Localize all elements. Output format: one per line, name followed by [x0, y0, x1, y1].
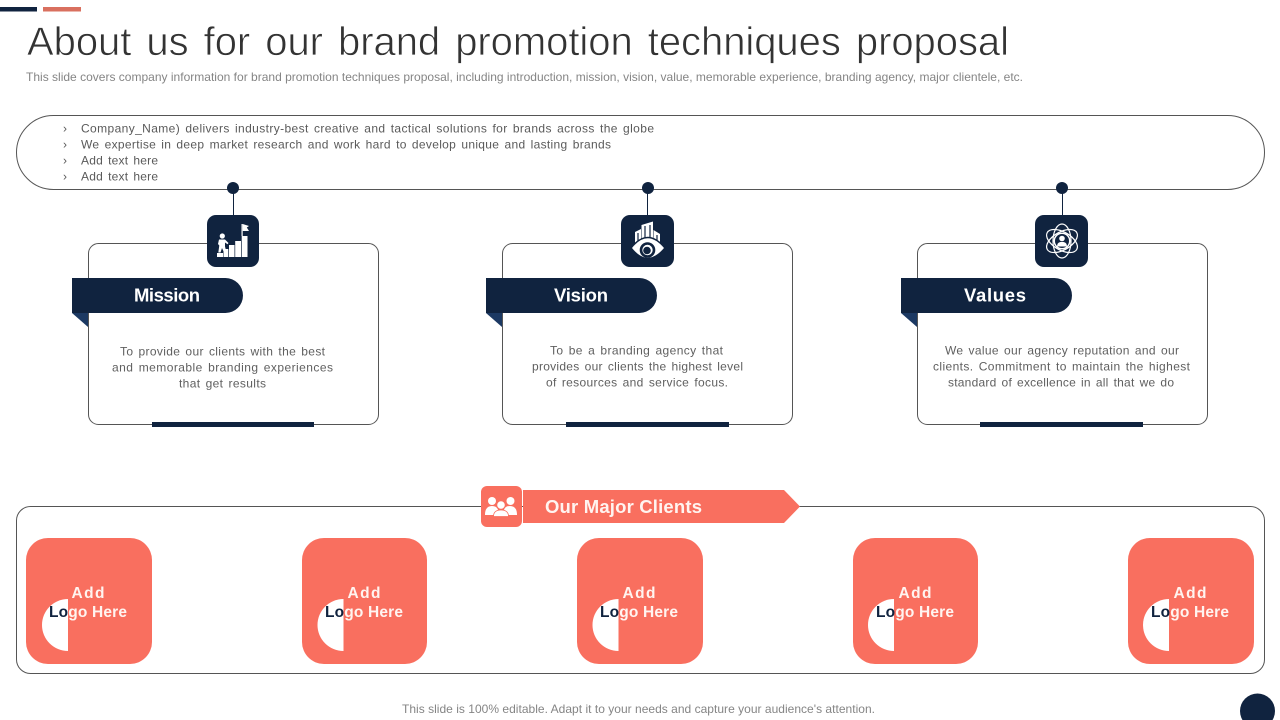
footer note: This slide is 100% editable. Adapt it to your needs and capture your audience's attention. [402, 702, 875, 716]
panel: values [901, 182, 1208, 427]
text: vision description: of resources and service focus. [546, 376, 728, 390]
connector: values [1056, 182, 1068, 216]
accent bar: vision [566, 422, 729, 427]
panel: major clients [16, 486, 1264, 674]
panel: introduction pill: › [63, 122, 67, 136]
text: vision description: provides our clients the highest level [532, 360, 743, 374]
panel: introduction pill: › [63, 138, 67, 152]
panel: introduction pill: Add text here [81, 170, 158, 184]
panel: introduction pill [16, 116, 1264, 190]
ribbon: values [901, 278, 1072, 327]
text: vision description [532, 344, 743, 390]
accent bar: values [980, 422, 1143, 427]
ribbon: mission [72, 278, 243, 327]
text: mission description: and memorable branding experiences [112, 360, 333, 374]
logo tile 2: Logo Here [325, 604, 403, 621]
ribbon: values: Values [964, 284, 1026, 306]
banner: our major clients [523, 490, 800, 523]
text: mission description [112, 344, 333, 390]
subtitle: This slide covers company information for brand promotion techniques proposal, including introduction, mission, vision, value, memorable experience, branding agency, major clientele, etc. [26, 70, 1023, 84]
panel: introduction pill: › [63, 170, 67, 184]
text: values description: We value our agency reputation and our [945, 344, 1179, 358]
icon: eye and buildings [621, 215, 674, 267]
text: values description: standard of excellence in all that we do [948, 376, 1174, 390]
panel: introduction pill: Add text here [81, 154, 158, 168]
panel: mission [72, 182, 378, 427]
corner circle [1240, 694, 1275, 720]
logo tile 1 [26, 538, 152, 664]
icon: stairs with flag [207, 215, 259, 267]
ribbon: mission: Mission [134, 284, 200, 306]
connector: vision [642, 182, 654, 216]
panel: introduction pill: › [63, 154, 67, 168]
ribbon: vision [486, 278, 657, 327]
ribbon: vision: Vision [554, 284, 608, 306]
text: values description [933, 344, 1191, 390]
logo tile 2: Add [348, 585, 380, 602]
panel: introduction pill: We expertise in deep market research and work hard to develop unique and lasting brands [81, 138, 611, 152]
title: About us for our brand promotion techniques proposal [27, 20, 1009, 64]
banner: our major clients: Our Major Clients [545, 496, 702, 517]
text: mission description: To provide our clients with the best [120, 344, 326, 358]
logo tile 4: Add [898, 585, 932, 602]
logo tile 4 [853, 538, 978, 664]
text: mission description: that get results [179, 376, 266, 390]
logo tile 1: Add [72, 585, 104, 602]
panel: vision [486, 182, 792, 427]
logo tile 5: Logo Here [1151, 604, 1229, 621]
logo tile 5: Add [1174, 585, 1206, 602]
icon: atom with person [1035, 215, 1088, 267]
icon: client group [481, 486, 522, 527]
logo tile 4: Logo Here [876, 604, 954, 621]
panel: introduction pill: Company_Name) delivers industry-best creative and tactical solutions for brands across the globe [81, 122, 654, 136]
logo tile 1: Logo Here [49, 604, 127, 621]
accent bar: mission [152, 422, 314, 427]
top accent bars [0, 7, 81, 12]
logo tile 3: Logo Here [600, 604, 678, 621]
logo tile 2 [302, 538, 427, 664]
text: values description: clients. Commitment to maintain the highest [933, 360, 1191, 374]
logo tile 5 [1128, 538, 1254, 664]
text: vision description: To be a branding agency that [550, 344, 724, 358]
logo tile 3: Add [622, 585, 656, 602]
logo tile 3 [577, 538, 703, 664]
connector: mission [227, 182, 239, 216]
